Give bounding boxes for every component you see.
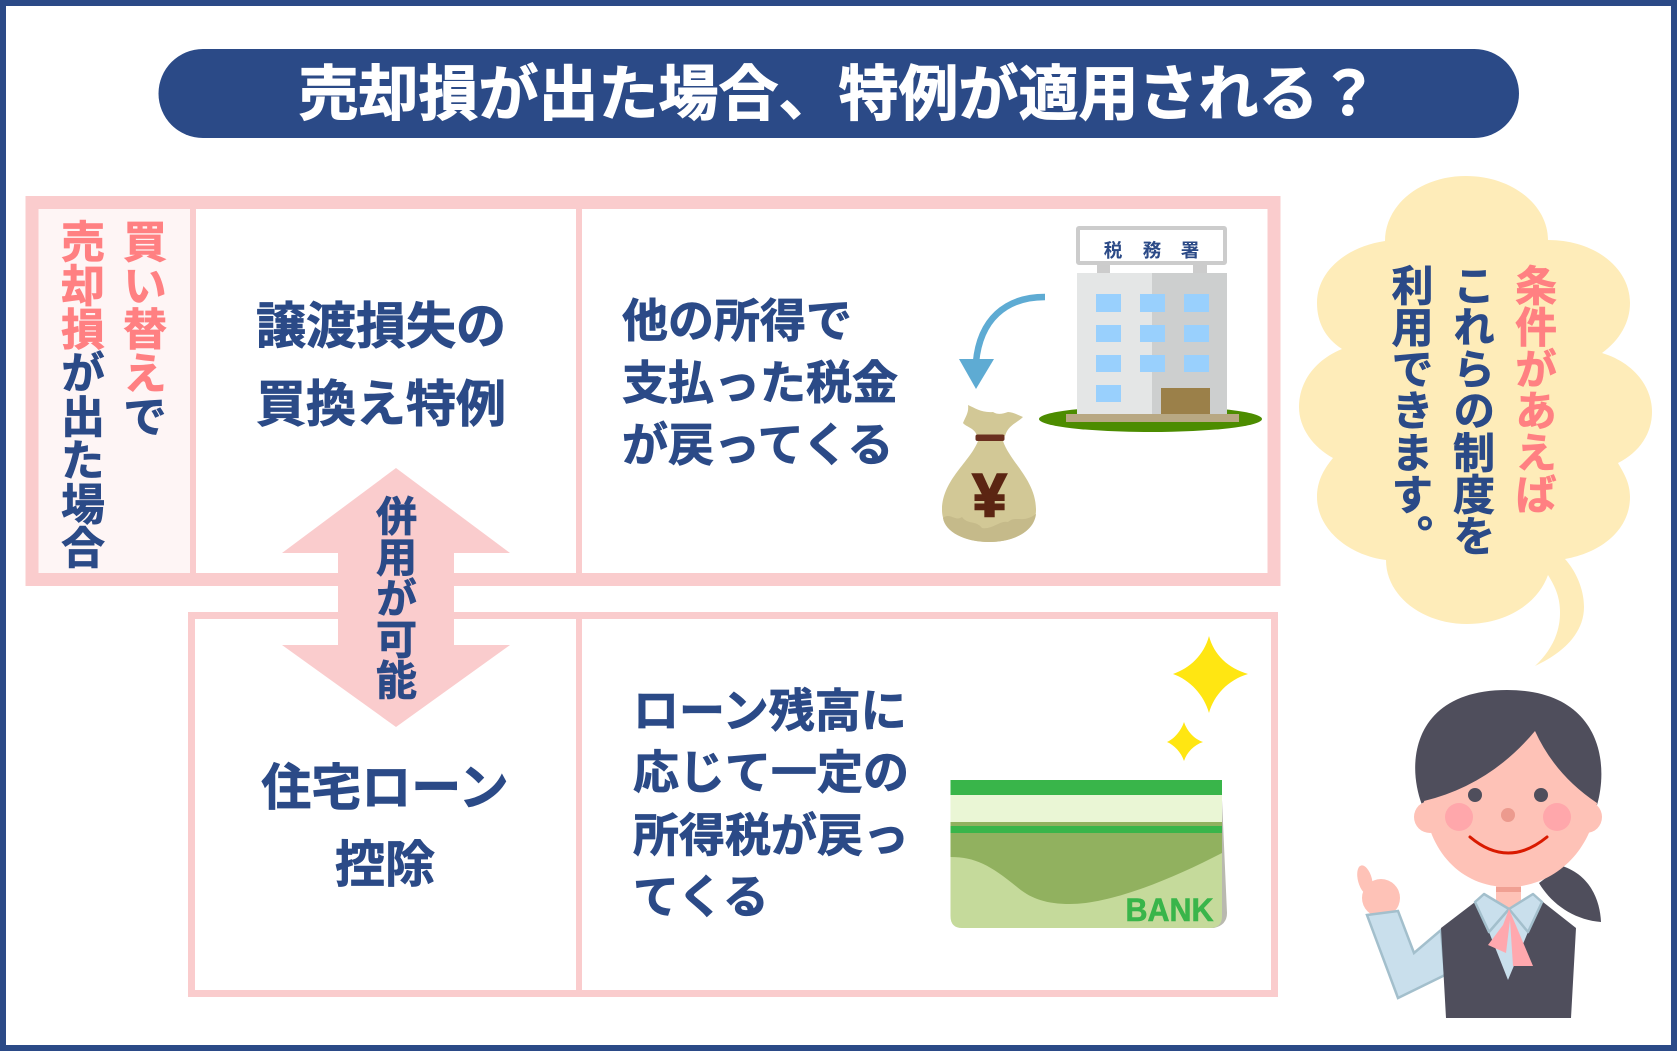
arrow: refund from tax office to money bag	[959, 297, 1045, 389]
heading: mortgage deduction: 控除	[335, 837, 435, 893]
icon: yen money bag: ¥	[973, 462, 1007, 529]
text: income tax returned by loan balance: ローン残高に	[633, 685, 907, 737]
speech bubble	[1299, 176, 1652, 666]
text: income tax returned by loan balance: 所得税が戻っ	[633, 810, 909, 862]
ponytail	[1539, 866, 1601, 922]
speech bubble: これらの制度を	[1448, 264, 1495, 557]
title banner: 売却損が出た場合、特例が適用される？	[298, 61, 1378, 128]
heading: mortgage deduction: 住宅ローン	[261, 760, 509, 816]
neck	[1496, 883, 1521, 910]
row heading: purchase replacement with loss: 売却損 が出た場合	[54, 219, 105, 569]
ribbon tie	[1488, 909, 1533, 966]
heading: replacement loss rule: 買換え特例	[256, 376, 506, 432]
cheeks	[1445, 803, 1473, 831]
text: other income tax returned: 支払った税金	[622, 357, 898, 409]
text: other income tax returned: 他の所得で	[622, 295, 852, 347]
face	[1424, 731, 1597, 887]
heading: replacement loss rule	[256, 298, 506, 432]
speech bubble: 利用できます。	[1386, 264, 1434, 557]
icon: tax office building	[1039, 228, 1262, 432]
text: income tax returned by loan balance	[633, 685, 909, 923]
speech bubble: 条件があえば	[1510, 264, 1557, 515]
text: income tax returned by loan balance: てくる	[633, 871, 769, 923]
title banner	[158, 49, 1519, 138]
vest	[1441, 902, 1576, 1018]
mouth	[1470, 837, 1547, 853]
panel: mortgage loan deduction	[192, 612, 1274, 997]
ears	[1414, 801, 1446, 833]
heading: mortgage deduction	[261, 760, 509, 893]
double arrow: can be combined	[282, 468, 510, 727]
icon: sparkles	[1167, 636, 1248, 761]
hair	[1415, 690, 1601, 805]
eyes	[1468, 788, 1482, 802]
nose	[1501, 808, 1515, 822]
text: other income tax returned	[622, 295, 898, 471]
icon: tax office building: 務	[1143, 240, 1162, 261]
icon: tax office building: 署	[1181, 240, 1199, 261]
raised arm	[1354, 864, 1445, 998]
double arrow: can be combined: 併用が可能	[370, 495, 417, 700]
heading: replacement loss rule: 譲渡損失の	[256, 298, 506, 354]
illustration: woman pointing up	[1354, 690, 1602, 1018]
icon: bank passbook: BANK	[1126, 892, 1214, 928]
row heading: purchase replacement with loss: 買い替え で	[116, 219, 166, 438]
icon: bank passbook	[950, 780, 1227, 928]
text: income tax returned by loan balance: 応じて一定の	[633, 746, 909, 798]
panel: replacement purchase special rule	[32, 202, 1274, 580]
icon: yen money bag	[942, 405, 1036, 542]
icon: tax office building: 税	[1104, 240, 1123, 261]
text: other income tax returned: が戻ってくる	[622, 419, 893, 471]
collar and shirt	[1475, 894, 1542, 980]
row heading: purchase replacement with loss	[54, 219, 166, 569]
